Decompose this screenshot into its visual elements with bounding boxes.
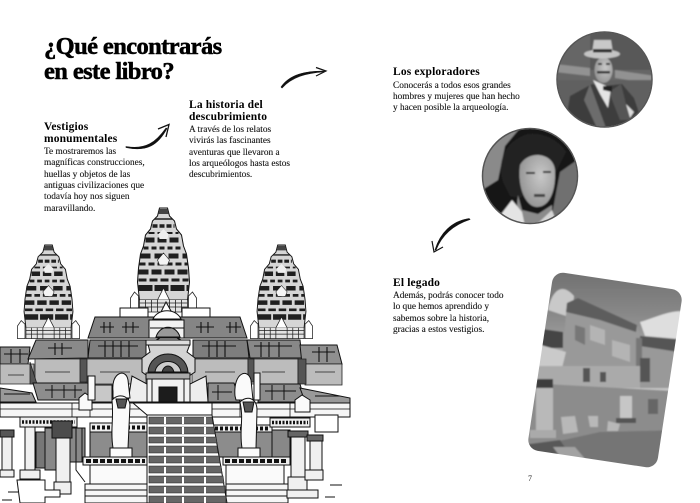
text block: Vestigios monumentales: huellas y objetos de las	[44, 170, 130, 180]
text block: Vestigios monumentales: magníficas construcciones,	[44, 158, 145, 168]
lower roofs	[0, 383, 350, 404]
text block: Los exploradores	[393, 66, 520, 113]
text block: El legado: gracias a estos vestigios.	[393, 325, 484, 335]
text block: La historia del descubrimiento: La historia del	[189, 99, 263, 111]
text block: La historia del descubrimiento: los arqueólogos hasta estos	[189, 159, 290, 169]
central gate	[128, 302, 208, 402]
photo: woman	[483, 129, 577, 223]
central tower	[130, 208, 196, 312]
text block: El legado: El legado	[393, 276, 440, 288]
text block: La historia del descubrimiento: vivirás las fascinantes	[189, 136, 271, 146]
left tower	[17, 245, 80, 339]
walls	[0, 359, 342, 385]
page number: 7	[528, 474, 532, 483]
text block: El legado: sabemos sobre la historia,	[393, 314, 489, 324]
illustration: Angkor Wat temple	[0, 208, 350, 503]
photo frame: man	[557, 32, 652, 127]
text block: Vestigios monumentales	[44, 121, 145, 214]
text block: El legado: Además, podrás conocer todo	[393, 291, 504, 301]
lower terraces	[0, 403, 350, 503]
text block: El legado	[393, 276, 504, 335]
text block: El legado: lo que hemos aprendido y	[393, 302, 489, 312]
columns	[0, 421, 342, 503]
text block: Vestigios monumentales: antiguas civilizaciones que	[44, 181, 144, 191]
text block: La historia del descubrimiento	[188, 99, 290, 180]
arrow: vestigios to historia	[126, 124, 169, 149]
text block: Los exploradores: y hacen posible la arqueología.	[393, 103, 508, 113]
photo: man with hat	[558, 32, 652, 126]
title: ¿Qué encontrarás	[44, 33, 222, 60]
arrow: exploradores to legado	[432, 218, 470, 252]
text block: La historia del descubrimiento: A través de los relatos	[189, 125, 271, 135]
title	[44, 33, 222, 84]
text block: Los exploradores: hombres y mujeres que han hecho	[393, 92, 520, 102]
right tower	[250, 245, 313, 339]
text block: Vestigios monumentales: todavía hoy nos siguen	[44, 192, 129, 202]
central staircase	[133, 403, 227, 503]
title: en este libro?	[44, 58, 174, 84]
photo frame: woman	[482, 128, 578, 224]
text block: La historia del descubrimiento: descubrimiento	[189, 110, 267, 122]
text block: La historia del descubrimiento: aventuras que llevaron a	[189, 148, 280, 158]
upper roofs	[0, 308, 342, 364]
text block: La historia del descubrimiento: descubrimientos.	[189, 170, 252, 180]
arrow: historia to exploradores	[281, 68, 326, 88]
text block: Vestigios monumentales: maravillando.	[44, 204, 95, 214]
text block: Los exploradores: Los exploradores	[393, 66, 480, 78]
text block: Vestigios monumentales: Vestigios	[44, 121, 88, 133]
text block: Los exploradores: Conocerás a todos esos grandes	[393, 80, 511, 90]
text block: Vestigios monumentales: Te mostraremos las	[44, 147, 116, 157]
photo: ruins card	[528, 272, 682, 468]
lion statues	[79, 373, 310, 457]
text block: Vestigios monumentales: monumentales	[44, 132, 117, 144]
